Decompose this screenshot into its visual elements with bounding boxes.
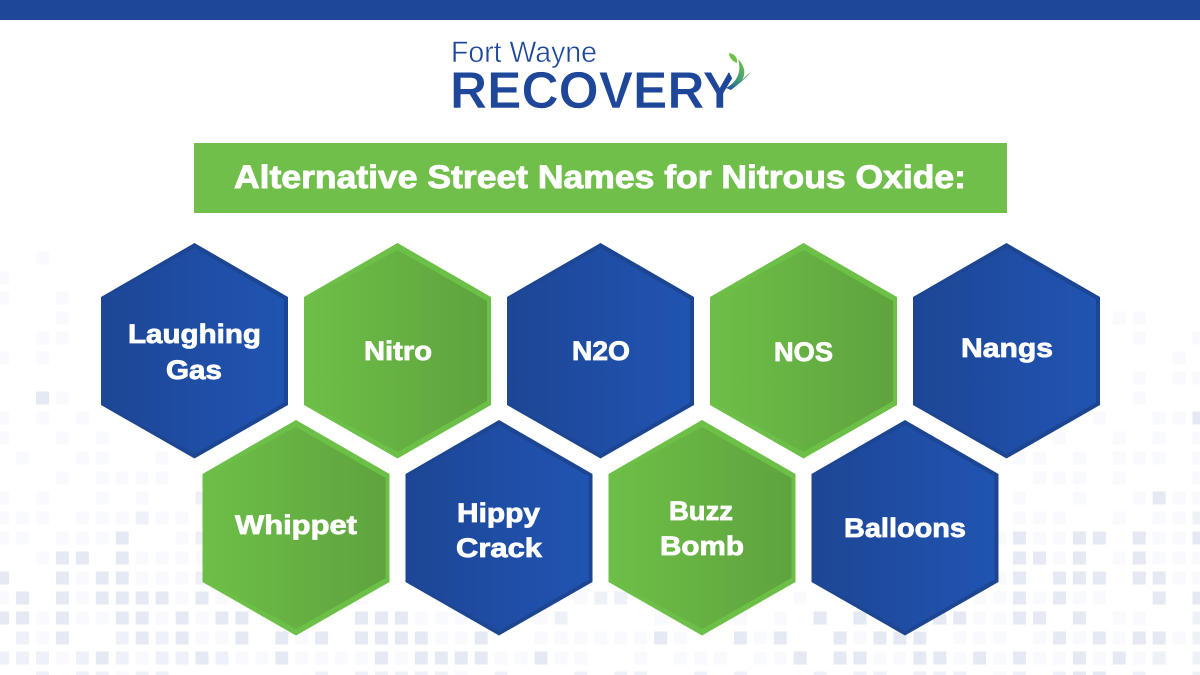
hexagon: Hippy Crack: Crack bbox=[456, 533, 543, 563]
hexagon: Whippet: Whippet bbox=[235, 510, 357, 540]
hexagon: Nangs: Nangs bbox=[961, 333, 1053, 363]
hexagon: Nitro: Nitro bbox=[364, 336, 432, 366]
hexagon: NOS bbox=[710, 243, 897, 458]
hexagon: Laughing Gas bbox=[101, 243, 288, 458]
hexagon: Balloons: Balloons bbox=[844, 513, 966, 543]
title banner bbox=[194, 143, 1007, 213]
hexagon: Nangs bbox=[913, 243, 1100, 458]
hexagon: N2O bbox=[507, 243, 694, 458]
icon: sprout on the Y bbox=[726, 53, 751, 90]
hexagon: Hippy Crack: Hippy bbox=[457, 498, 540, 528]
hexagon: Balloons bbox=[812, 420, 998, 636]
background pixel pattern bbox=[0, 252, 1200, 675]
logo text: Fort Wayne: Fort Wayne bbox=[451, 36, 597, 69]
heading: Alternative Street Names for Nitrous Oxide: bbox=[234, 159, 966, 195]
logo: Fort Wayne Recovery bbox=[450, 36, 751, 120]
hexagon: Buzz Bomb: Bomb bbox=[660, 531, 744, 561]
hexagon: N2O: N2O bbox=[572, 336, 630, 366]
hexagon: Hippy Crack bbox=[406, 420, 592, 636]
hexagon: Buzz Bomb: Buzz bbox=[669, 496, 733, 526]
hexagon: Buzz Bomb bbox=[608, 420, 796, 636]
hexagon: Laughing Gas: Gas bbox=[166, 355, 222, 385]
logo text: RECOVERY: RECOVERY bbox=[450, 62, 737, 120]
hexagon: NOS: NOS bbox=[774, 337, 833, 367]
hexagon: Laughing Gas: Laughing bbox=[128, 319, 261, 349]
hexagon: Whippet bbox=[202, 420, 390, 636]
hexagon: Nitro bbox=[304, 243, 491, 458]
top bar bbox=[0, 0, 1200, 20]
